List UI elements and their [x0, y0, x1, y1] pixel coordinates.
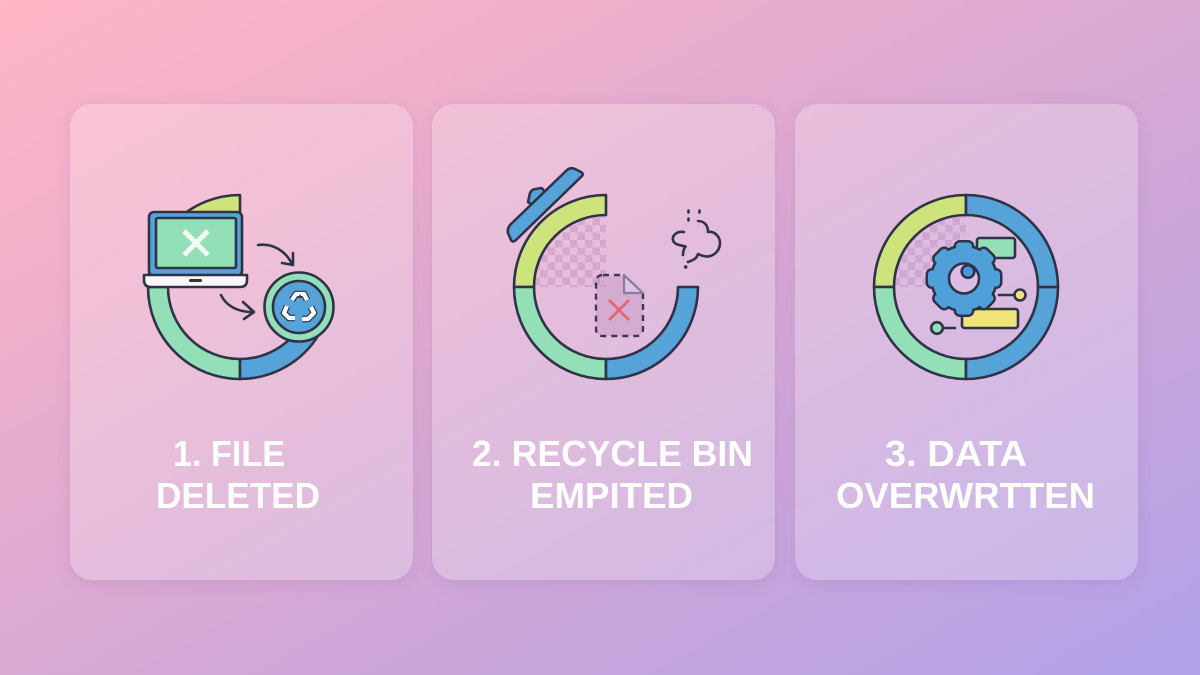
ring segment: green	[148, 287, 240, 379]
arrow: laptop to bin, lower	[221, 295, 254, 319]
panel: 1. file deleted	[70, 104, 413, 580]
icon: deleted document	[596, 275, 643, 336]
heading: 1. File Deleted: 1. FILE	[173, 433, 285, 474]
icon: open ring, lid, document and smoke	[508, 168, 720, 379]
heading: 3. Data Overwrtten	[836, 433, 1095, 516]
panel: 3. data overwritten	[795, 104, 1138, 580]
ring segment: blue	[240, 323, 320, 379]
ring segment: green	[874, 287, 966, 379]
panel: 2. recycle bin emptied	[432, 104, 775, 580]
ring segment: yellow	[874, 195, 966, 287]
heading: 2. Recycle Bin Empited: 2. RECYCLE BIN	[472, 433, 753, 474]
heading: 1. File Deleted	[156, 433, 320, 516]
heading: 2. Recycle Bin Empited: EMPITED	[530, 475, 693, 516]
icon: gear	[928, 242, 1000, 314]
arrow: laptop to bin, upper	[258, 245, 293, 265]
heading: 3. Data Overwrtten: OVERWRTTEN	[836, 475, 1095, 516]
checkered erased area	[534, 215, 606, 287]
icon: full ring with gear and blocks	[874, 195, 1058, 379]
connector: yellow dot	[999, 290, 1026, 300]
ring segment: blue lower	[966, 287, 1058, 379]
ring segment: yellow	[148, 195, 240, 287]
icon: recycle badge	[264, 272, 334, 342]
icon: partial ring, laptop and recycle bin	[144, 195, 334, 379]
heading: 3. Data Overwrtten: 3. DATA	[885, 433, 1027, 474]
ring segment: blue upper	[966, 195, 1058, 287]
heading: 1. File Deleted: DELETED	[156, 475, 320, 516]
ring segment: yellow	[514, 195, 606, 287]
block: yellow	[962, 309, 1018, 328]
ring segment: green	[514, 287, 606, 379]
checkered erased area	[894, 215, 966, 287]
icon: laptop	[144, 212, 247, 287]
ring segment: blue	[606, 287, 698, 379]
heading: 2. Recycle Bin Empited	[472, 433, 753, 516]
connector: green dot	[931, 322, 955, 334]
icon: smoke cloud	[673, 210, 720, 269]
block: green	[977, 238, 1015, 258]
icon: bin lid	[508, 168, 583, 242]
